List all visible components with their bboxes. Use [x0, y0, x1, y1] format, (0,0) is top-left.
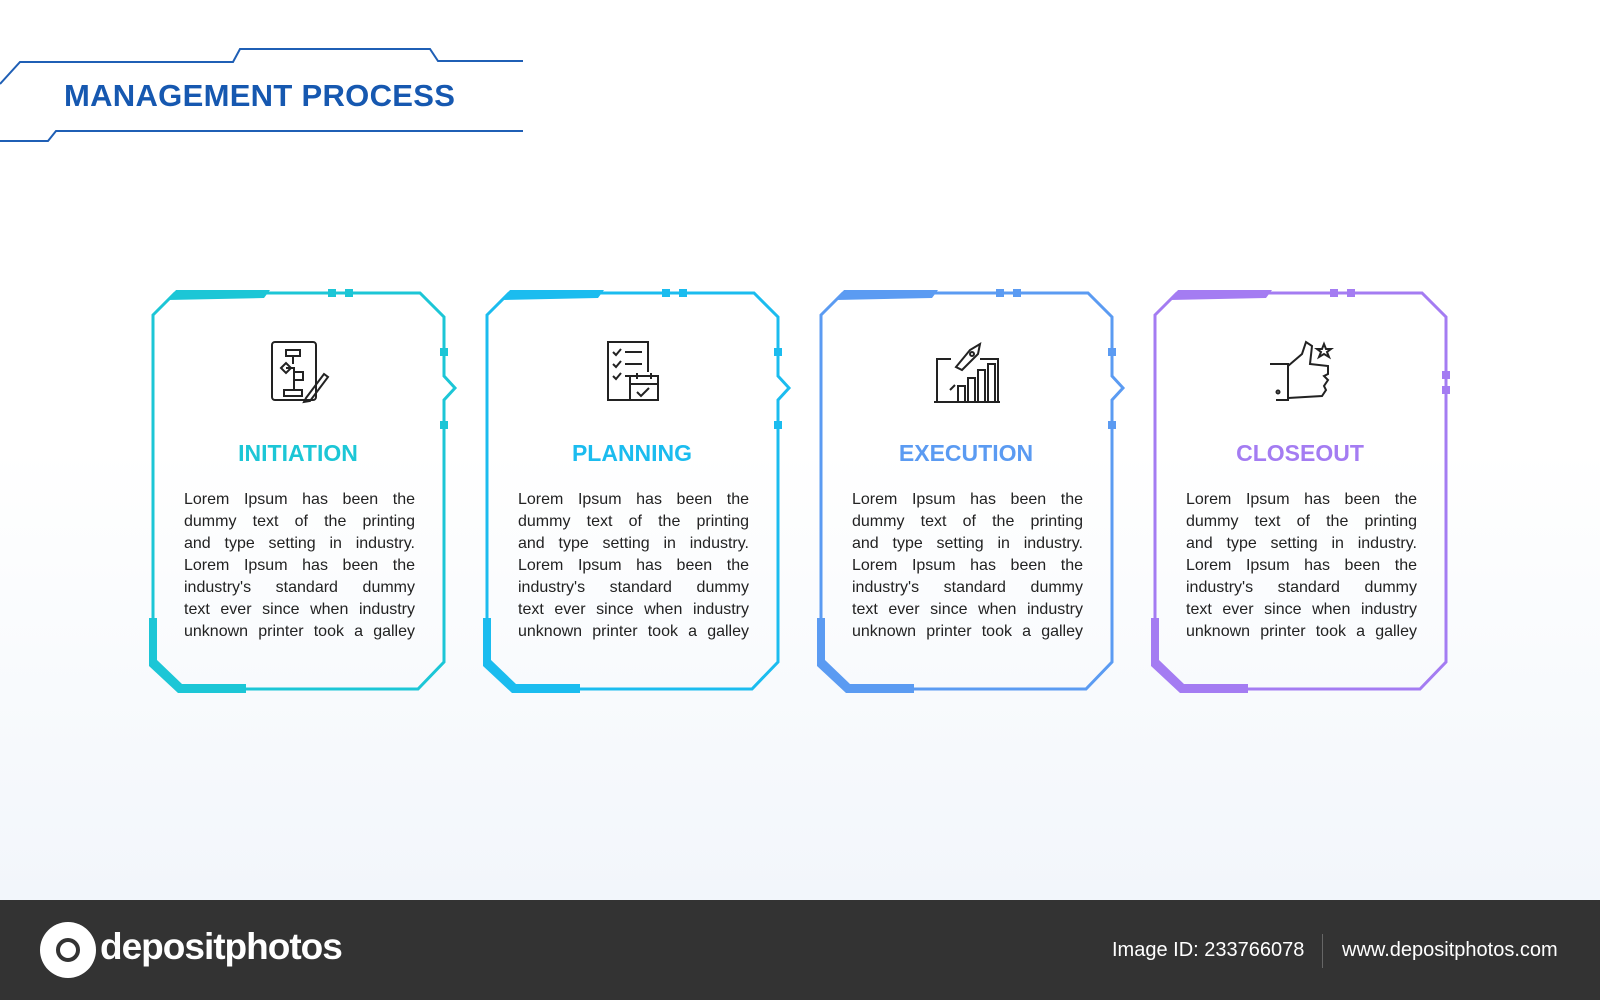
icon: checklist	[607, 341, 659, 401]
text block: text ever since when industry	[518, 601, 749, 618]
text block: and type setting in industry.	[1186, 535, 1417, 552]
text block: dummy text of the printing	[852, 513, 1083, 530]
text block: dummy text of the printing	[184, 513, 415, 530]
text block: unknown printer took a galley	[518, 623, 749, 640]
text block: industry's standard dummy	[184, 579, 415, 596]
text block	[852, 491, 1083, 640]
header banner	[0, 48, 523, 142]
heading: INITIATION	[238, 440, 358, 466]
text block	[518, 491, 749, 640]
text block: and type setting in industry.	[184, 535, 415, 552]
text block: text ever since when industry	[184, 601, 415, 618]
text block: Lorem Ipsum has been the	[852, 557, 1083, 574]
text block: dummy text of the printing	[1186, 513, 1417, 530]
panel: execution	[817, 289, 1125, 693]
text block: Lorem Ipsum has been the	[852, 491, 1083, 508]
footer bar	[0, 900, 1600, 1000]
text block: text ever since when industry	[1186, 601, 1417, 618]
text block: and type setting in industry.	[518, 535, 749, 552]
text block: text ever since when industry	[852, 601, 1083, 618]
text block: dummy text of the printing	[518, 513, 749, 530]
text block	[184, 491, 415, 640]
heading: CLOSEOUT	[1236, 440, 1364, 466]
text block: industry's standard dummy	[852, 579, 1083, 596]
text block: Lorem Ipsum has been the	[1186, 557, 1417, 574]
title: MANAGEMENT PROCESS	[64, 78, 455, 113]
panel: initiation	[149, 289, 457, 693]
text block: industry's standard dummy	[518, 579, 749, 596]
website: www.depositphotos.com	[1342, 939, 1558, 961]
heading: EXECUTION	[899, 440, 1033, 466]
text block	[1186, 491, 1417, 640]
icon: rocket chart	[934, 342, 1000, 403]
heading: PLANNING	[572, 440, 692, 466]
text block: unknown printer took a galley	[1186, 623, 1417, 640]
text block: Lorem Ipsum has been the	[1186, 491, 1417, 508]
image id: Image ID: 233766078	[1112, 939, 1304, 961]
icon: flowchart	[271, 341, 330, 404]
text block: Lorem Ipsum has been the	[518, 557, 749, 574]
logo text: depositphotos	[100, 926, 342, 967]
icon: camera logo	[40, 922, 96, 978]
text block: industry's standard dummy	[1186, 579, 1417, 596]
panel: closeout	[1151, 289, 1450, 693]
text block: Lorem Ipsum has been the	[184, 491, 415, 508]
text block: unknown printer took a galley	[184, 623, 415, 640]
text block: and type setting in industry.	[852, 535, 1083, 552]
icon: thumbs up	[1270, 340, 1334, 401]
text block: Lorem Ipsum has been the	[184, 557, 415, 574]
text block: unknown printer took a galley	[852, 623, 1083, 640]
text block: Lorem Ipsum has been the	[518, 491, 749, 508]
panel: planning	[483, 289, 791, 693]
